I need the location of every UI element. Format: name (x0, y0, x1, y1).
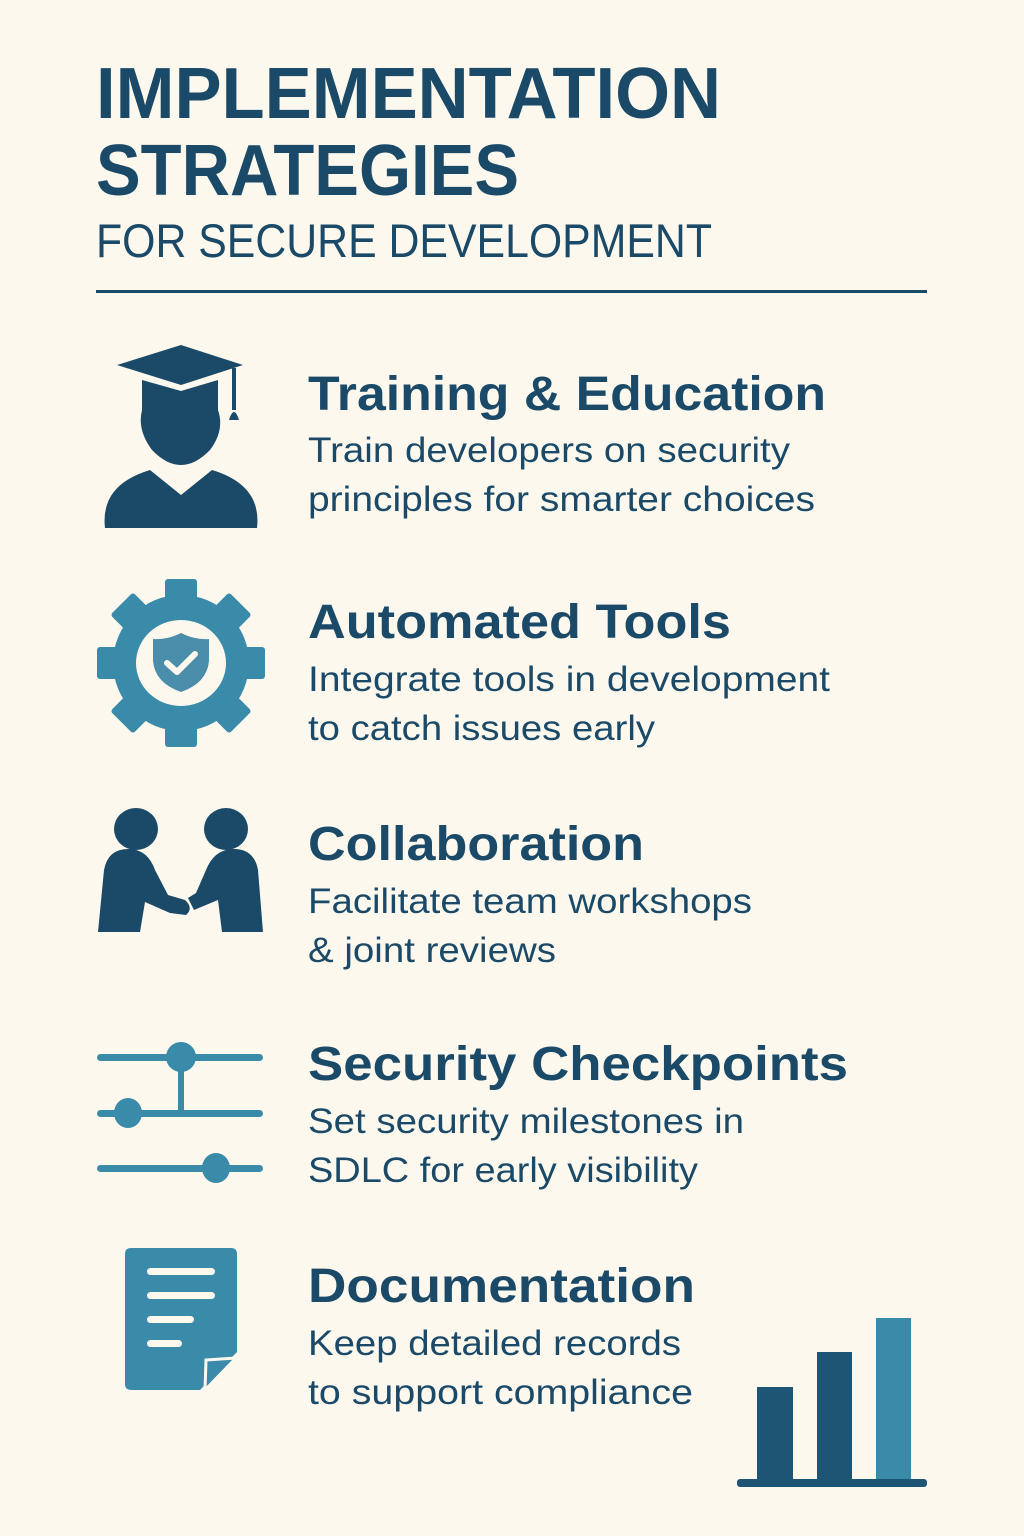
title: IMPLEMENTATION (96, 54, 721, 134)
title: STRATEGIES (96, 131, 519, 211)
bar chart (737, 1318, 927, 1487)
text: training desc: principles for smarter choices (308, 480, 815, 519)
text: collaboration desc: & joint reviews (308, 931, 556, 970)
icon: graduate (105, 345, 257, 528)
text: documentation desc: to support compliance (308, 1373, 693, 1412)
heading: checkpoints: Security Checkpoints (308, 1038, 848, 1091)
heading: collaboration: Collaboration (308, 818, 644, 871)
text: documentation desc: Keep detailed records (308, 1324, 681, 1363)
icon: gear shield (97, 579, 265, 747)
text: collaboration desc (308, 882, 752, 970)
text: checkpoints desc: SDLC for early visibility (308, 1151, 699, 1190)
text: collaboration desc: Facilitate team workshops (308, 882, 752, 921)
text: training desc: Train developers on security (308, 431, 791, 470)
text: tools desc: to catch issues early (308, 709, 656, 748)
icon: handshake (98, 808, 263, 932)
text: checkpoints desc (308, 1102, 744, 1190)
title (96, 54, 721, 211)
text: documentation desc (308, 1324, 693, 1412)
heading: training: Training & Education (308, 368, 826, 421)
icon: sliders (97, 1042, 263, 1183)
text: training desc (308, 431, 815, 519)
icon: document (125, 1248, 237, 1390)
heading: automated tools: Automated Tools (308, 596, 731, 649)
text: tools desc (308, 660, 830, 748)
text: tools desc: Integrate tools in development (308, 660, 830, 699)
text: checkpoints desc: Set security milestones in (308, 1102, 744, 1141)
heading: documentation: Documentation (308, 1260, 695, 1313)
subtitle: FOR SECURE DEVELOPMENT (96, 214, 712, 267)
